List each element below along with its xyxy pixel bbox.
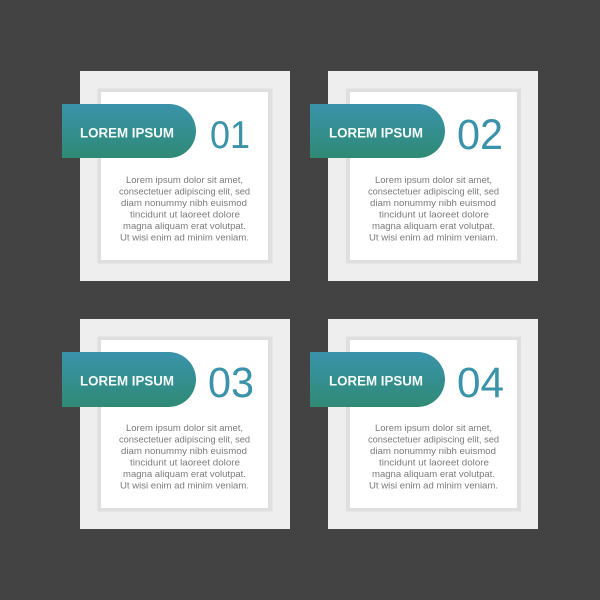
label: tab 03 <box>62 352 196 407</box>
text block 02: Lorem ipsum dolor sit amet, <box>375 175 492 185</box>
number 03: 03 <box>208 359 254 407</box>
text block 02: diam nonummy nibh euismod <box>370 198 496 208</box>
number 04: 04 <box>457 359 504 407</box>
text block 01: magna aliquam erat volutpat. <box>123 221 246 231</box>
text block 04: Ut wisi enim ad minim veniam. <box>369 480 498 490</box>
label: tab 01 <box>62 104 196 158</box>
text block 04 <box>368 423 499 490</box>
text block 03: tincidunt ut laoreet dolore <box>130 458 240 468</box>
text block 01: Lorem ipsum dolor sit amet, <box>126 175 243 185</box>
text block 04: consectetuer adipiscing elit, sed <box>368 434 499 444</box>
panel: card 03 <box>62 319 290 529</box>
panel: card 01 <box>62 71 290 281</box>
text block 04: Lorem ipsum dolor sit amet, <box>375 423 492 433</box>
number 01: 01 <box>210 114 250 157</box>
text block 03: Ut wisi enim ad minim veniam. <box>120 480 249 490</box>
text block 02: consectetuer adipiscing elit, sed <box>368 186 499 196</box>
number 02: 02 <box>457 111 503 159</box>
label: tab 02 <box>310 104 445 158</box>
text block 02 <box>368 175 499 242</box>
label: tab 03: LOREM IPSUM <box>80 373 174 388</box>
text block 03: magna aliquam erat volutpat. <box>123 469 246 479</box>
text block 03: diam nonummy nibh euismod <box>121 446 247 456</box>
text block 02: magna aliquam erat volutpat. <box>372 221 495 231</box>
text block 01: diam nonummy nibh euismod <box>121 198 247 208</box>
label: tab 04: LOREM IPSUM <box>329 373 423 388</box>
text block 03: consectetuer adipiscing elit, sed <box>119 434 250 444</box>
label: tab 04 <box>310 352 445 407</box>
text block 01: tincidunt ut laoreet dolore <box>130 210 240 220</box>
text block 02: tincidunt ut laoreet dolore <box>379 210 489 220</box>
text block 04: diam nonummy nibh euismod <box>370 446 496 456</box>
panel: card 02 <box>310 71 538 281</box>
text block 04: magna aliquam erat volutpat. <box>372 469 495 479</box>
text block 01: consectetuer adipiscing elit, sed <box>119 186 250 196</box>
text block 03: Lorem ipsum dolor sit amet, <box>126 423 243 433</box>
panel: card 04 <box>310 319 538 529</box>
text block 01: Ut wisi enim ad minim veniam. <box>120 232 249 242</box>
text block 04: tincidunt ut laoreet dolore <box>379 458 489 468</box>
text block 03 <box>119 423 250 490</box>
label: tab 01: LOREM IPSUM <box>80 125 174 140</box>
text block 01 <box>119 175 250 242</box>
label: tab 02: LOREM IPSUM <box>329 125 423 140</box>
text block 02: Ut wisi enim ad minim veniam. <box>369 232 498 242</box>
